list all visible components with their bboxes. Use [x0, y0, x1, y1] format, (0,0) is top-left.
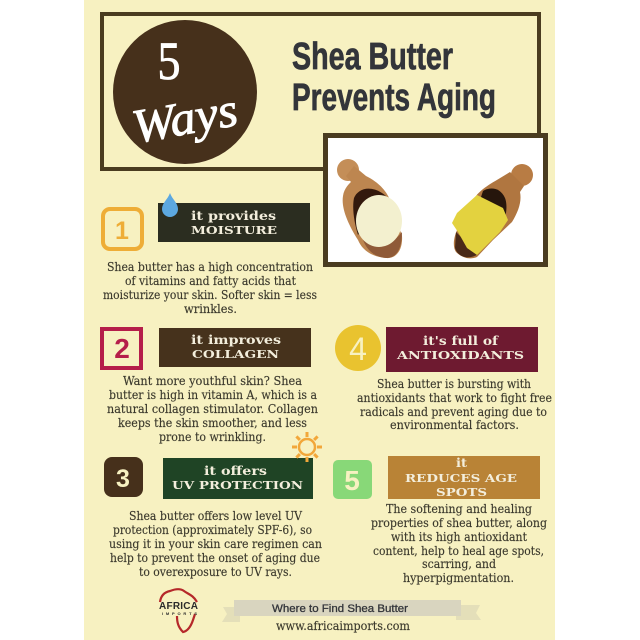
text: age spots description: properties of shea butter, along: [371, 515, 547, 530]
text: antioxidants description: [357, 376, 552, 432]
number badge 5: [333, 460, 372, 499]
text: age spots description: with its high antioxidant: [391, 529, 527, 544]
banner: it's full of antioxidants: [386, 327, 538, 372]
text: antioxidants description: radicals and prevent aging due to: [360, 404, 547, 419]
text: age spots description: [371, 501, 547, 585]
text: UV description: protection (approximately SPF-6), so: [113, 522, 312, 537]
banner: it offers UV protection: UV PROTECTION: [172, 479, 303, 492]
number badge 4: [335, 325, 381, 371]
banner: it reduces age spots: REDUCES AGE: [405, 472, 517, 485]
ribbon banner: Where to Find Shea Butter: [272, 603, 408, 615]
text: UV description: to overexposure to UV rays.: [139, 564, 292, 579]
title: Shea Butter: [292, 36, 453, 78]
text: collagen description: prone to wrinkling.: [159, 429, 266, 444]
text: antioxidants description: Shea butter is bursting with: [377, 376, 531, 391]
title: Prevents Aging: [292, 77, 496, 119]
text: UV description: help to prevent the onset of aging due: [110, 550, 320, 565]
banner: it provides moisture: it provides: [191, 209, 276, 223]
number badge 1: [103, 209, 142, 249]
number badge 4: 4: [349, 331, 367, 367]
banner: it reduces age spots: it: [456, 456, 467, 470]
text: antioxidants description: antioxidants that work to fight free: [357, 390, 552, 405]
text: age spots description: The softening and healing: [386, 501, 532, 516]
badge: 5 Ways: Ways: [128, 83, 242, 154]
banner: it offers UV protection: [163, 458, 313, 499]
banner: it reduces age spots: [388, 456, 540, 499]
logo: Africa Imports: AFRICA: [159, 601, 198, 612]
number badge 3: 3: [116, 465, 130, 493]
text: collagen description: butter is high in vitamin A, which is a: [109, 387, 317, 402]
ribbon banner: [222, 600, 481, 622]
text: collagen description: Want more youthful skin? Shea: [123, 373, 302, 388]
banner: it provides moisture: MOISTURE: [191, 224, 277, 237]
icon: sun: [292, 432, 322, 462]
section 4: antioxidants: [335, 325, 552, 432]
text: collagen description: natural collagen stimulator. Collagen: [107, 401, 318, 416]
website url: www.africaimports.com: [276, 618, 410, 633]
number badge 5: 5: [344, 465, 360, 496]
banner: it reduces age spots: SPOTS: [436, 486, 487, 499]
number badge 2: [102, 329, 141, 368]
banner: it's full of antioxidants: ANTIOXIDANTS: [396, 349, 524, 362]
header panel: [102, 14, 539, 169]
banner: it improves collagen: it improves: [191, 333, 281, 347]
logo: Africa Imports: IMPORTS: [162, 611, 197, 616]
text: age spots description: scarring, and: [422, 556, 496, 571]
footer: [159, 589, 481, 633]
photo: two scoops of shea butter: [326, 136, 546, 264]
number badge 2: 2: [114, 333, 130, 364]
text: UV description: [109, 508, 322, 579]
badge: 5 Ways: [113, 20, 257, 164]
text: collagen description: keeps the skin smoother, and less: [118, 415, 307, 430]
logo: Africa Imports: [159, 589, 198, 632]
number badge 3: [104, 457, 143, 497]
banner: it provides moisture: [158, 203, 310, 242]
banner: it improves collagen: COLLAGEN: [192, 348, 279, 361]
banner: it offers UV protection: it offers: [204, 464, 267, 478]
text: age spots description: content, help to heal age spots,: [373, 543, 544, 558]
badge: 5 Ways: 5: [158, 31, 180, 91]
section 3: UV protection: [104, 432, 322, 579]
left scoop: [337, 159, 402, 258]
right scoop: [452, 164, 533, 258]
text: moisture description: Shea butter has a high concentration: [107, 259, 313, 274]
icon: water drop: [162, 193, 178, 217]
text: UV description: using it in your skin care regimen can: [109, 536, 322, 551]
section 1: moisture: [103, 193, 317, 316]
banner: it's full of antioxidants: it's full of: [423, 334, 499, 348]
text: moisture description: moisturize your skin. Softer skin = less: [103, 287, 317, 302]
title: [292, 36, 496, 119]
text: moisture description: [103, 259, 317, 316]
number badge 1: 1: [115, 217, 129, 245]
section 2: collagen: [102, 328, 318, 444]
text: moisture description: wrinkles.: [184, 301, 237, 316]
text: UV description: Shea butter offers low level UV: [129, 508, 303, 523]
banner: it improves collagen: [159, 328, 311, 367]
text: collagen description: [107, 373, 318, 444]
text: age spots description: hyperpigmentation.: [403, 570, 514, 585]
text: moisture description: of vitamins and fatty acids that: [125, 273, 296, 288]
text: antioxidants description: environmental factors.: [390, 417, 519, 432]
section 5: age spots: [333, 456, 547, 585]
